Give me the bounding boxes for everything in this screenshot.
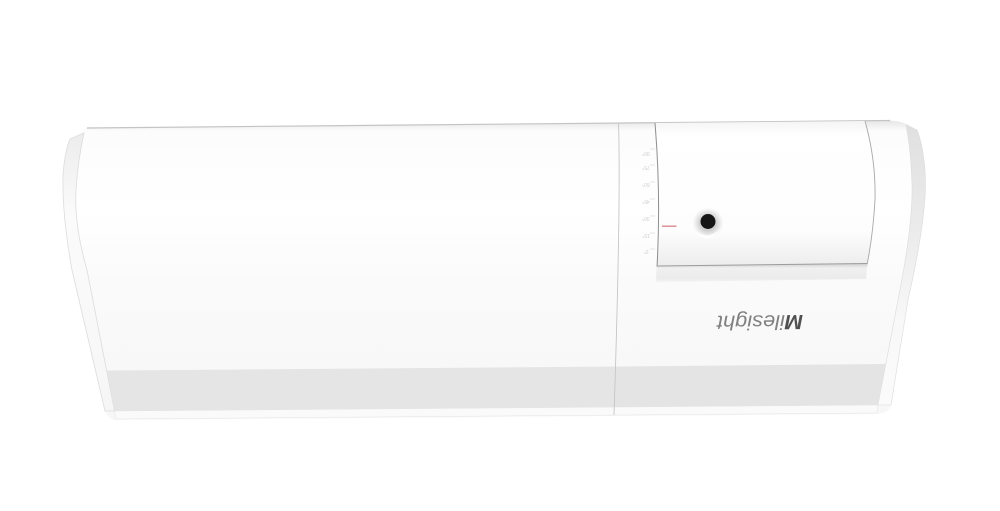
angle scale: 15° [642, 232, 650, 238]
bottom lip [114, 405, 878, 419]
device body [63, 120, 925, 420]
camera lens [692, 208, 724, 238]
angle scale: 45° [642, 198, 650, 204]
panel seam [614, 123, 619, 415]
angle scale: 0° [644, 248, 648, 254]
angle scale [642, 149, 655, 254]
grey band, right section [614, 364, 886, 408]
Milesight logo: Milesight [716, 310, 803, 334]
angle scale: 75° [642, 164, 650, 170]
recessed slot [656, 264, 868, 282]
right side panel [878, 125, 926, 405]
left side panel [63, 133, 114, 411]
red indicator tick [662, 226, 676, 227]
angle scale: 30° [642, 215, 650, 221]
lens cover [655, 121, 875, 282]
angle scale: 60° [642, 181, 650, 187]
angle scale: 90° [642, 150, 650, 156]
grey band, left section [107, 366, 616, 411]
